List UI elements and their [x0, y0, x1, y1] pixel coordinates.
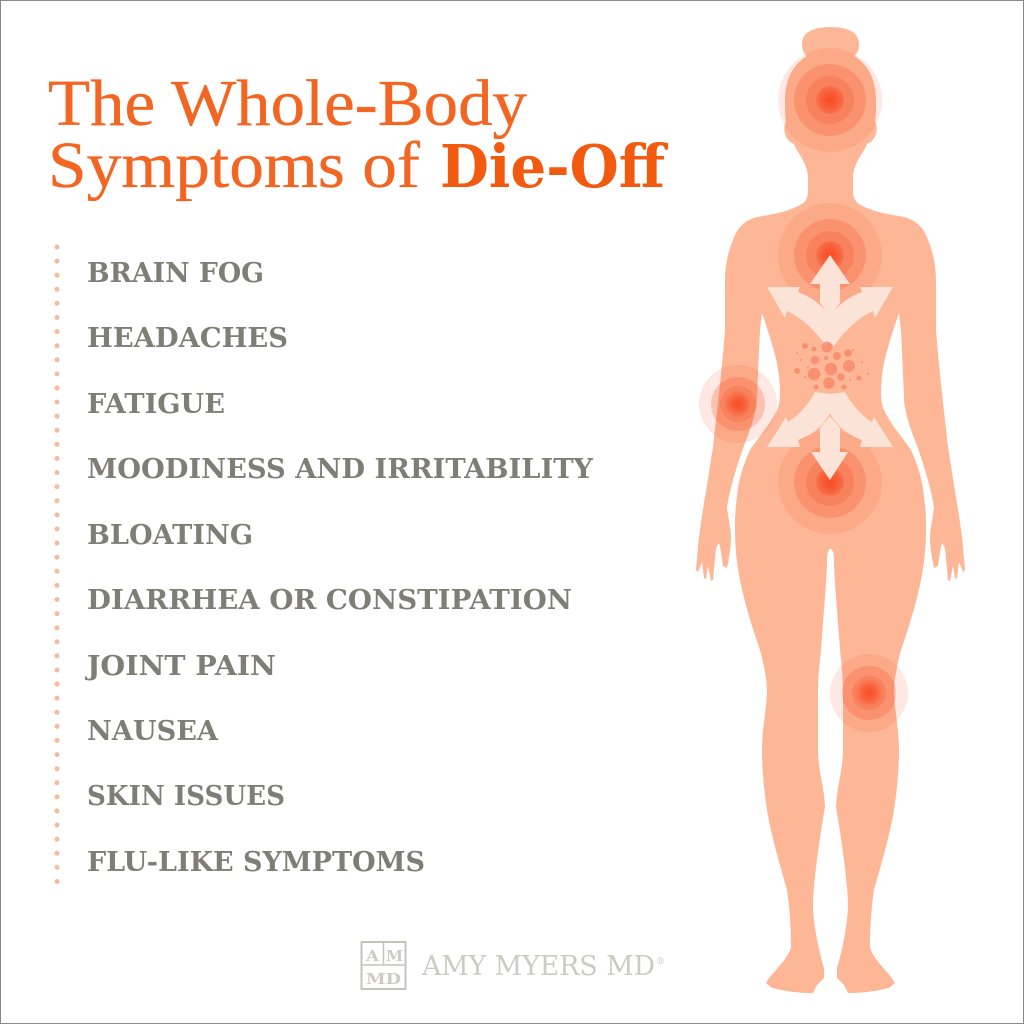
symptom list: FATIGUE [87, 389, 225, 420]
symptom list: NAUSEA [87, 716, 219, 747]
symptom list: BLOATING [87, 520, 253, 551]
title: The Whole-Body [48, 67, 527, 140]
pain point: knee [830, 654, 908, 732]
pain point: chest [778, 203, 882, 307]
symptom list: SKIN ISSUES [87, 781, 285, 812]
symptom list [85, 258, 594, 878]
title: Die-Off [440, 132, 668, 201]
symptom list: DIARRHEA OR CONSTIPATION [87, 585, 572, 616]
bacteria cluster [794, 342, 869, 390]
logo: AMY MYERS MD [421, 951, 655, 982]
dotted vertical line [54, 247, 60, 882]
pain point: elbow [699, 365, 777, 443]
logo: M [386, 947, 403, 965]
logo: A [365, 947, 379, 965]
logo: ® [656, 957, 665, 967]
logo: MD [366, 970, 401, 988]
title [48, 67, 668, 202]
pain point: pelvis [778, 430, 882, 534]
logo [361, 942, 665, 989]
title: Symptoms of [48, 129, 420, 202]
symptom list: MOODINESS AND IRRITABILITY [87, 454, 594, 485]
symptom list: HEADACHES [87, 323, 288, 354]
pain point: head [778, 48, 882, 152]
symptom list: FLU-LIKE SYMPTOMS [87, 847, 425, 878]
upward and outward arrows [767, 255, 893, 346]
downward and outward arrows [767, 392, 893, 480]
symptom list: JOINT PAIN [85, 651, 276, 682]
symptom list: BRAIN FOG [87, 258, 264, 289]
body silhouette [696, 27, 965, 993]
